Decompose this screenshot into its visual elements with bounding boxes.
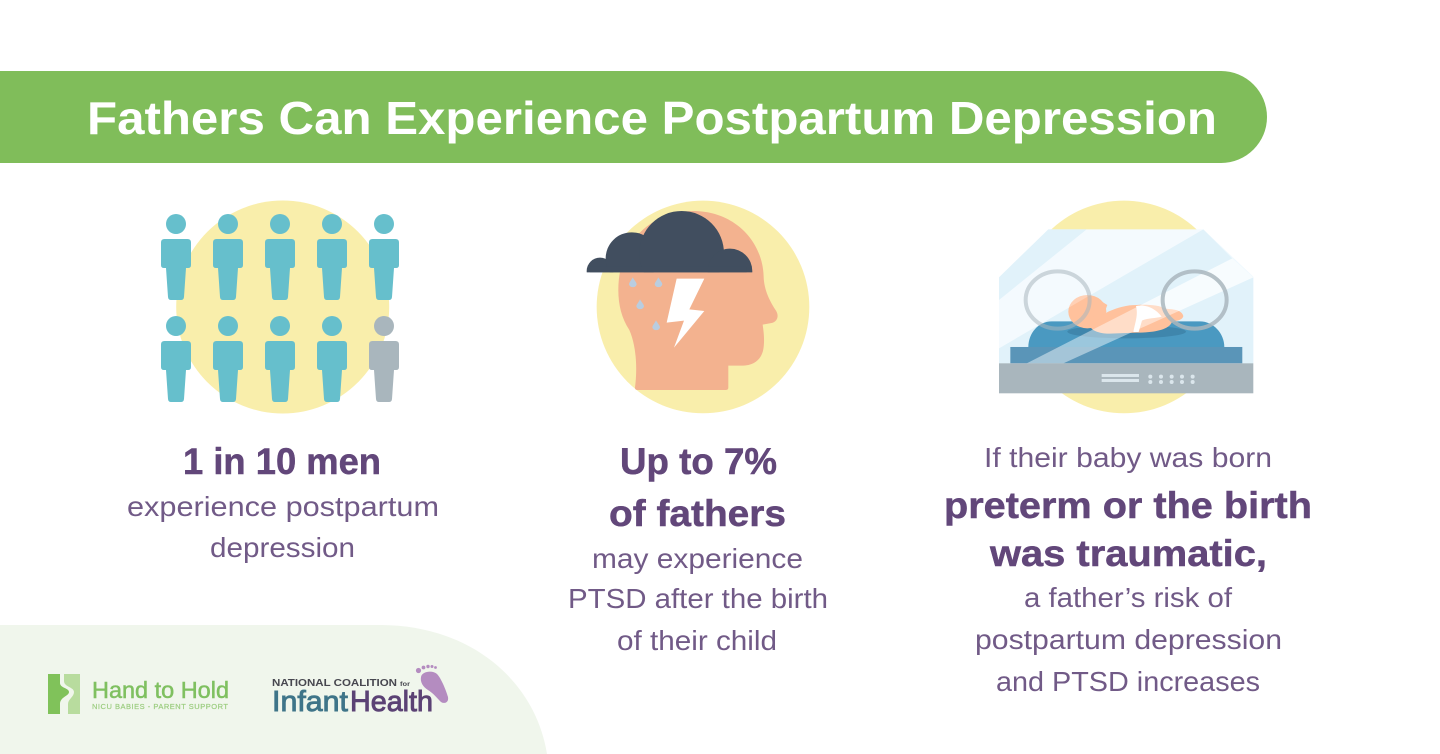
text block: up to 7% of fathers: of fathers xyxy=(609,493,786,534)
text block: up to 7% of fathers: may experience xyxy=(592,543,803,574)
text block: up to 7% of fathers: of their child xyxy=(617,625,777,656)
icon: head with storm cloud xyxy=(587,201,809,413)
text block: up to 7% of fathers: Up to 7% xyxy=(620,441,777,482)
logo: National Coalition for Infant Health xyxy=(272,665,448,718)
baby xyxy=(1068,295,1183,334)
text block: 1 in 10 men xyxy=(127,441,439,563)
text block: 1 in 10 men: depression xyxy=(210,532,355,563)
logo: National Coalition for Infant Health: for xyxy=(400,681,411,688)
text block: preterm or traumatic birth: postpartum depression xyxy=(975,624,1282,655)
logo: National Coalition for Infant Health: Health xyxy=(350,686,433,718)
incubator base xyxy=(999,363,1253,393)
text block: preterm or traumatic birth xyxy=(944,442,1312,697)
icon: lightning bolt xyxy=(667,279,704,348)
icon: incubator with baby xyxy=(999,201,1253,413)
text block: preterm or traumatic birth: preterm or the birth xyxy=(944,485,1312,526)
logo: National Coalition for Infant Health: Infant xyxy=(272,686,348,718)
text block: preterm or traumatic birth: was traumatic, xyxy=(989,533,1267,574)
panel: footer logos background xyxy=(0,625,547,754)
text block: up to 7% of fathers xyxy=(568,441,828,656)
icon: ten people, one in grey xyxy=(161,200,399,414)
title banner xyxy=(0,71,1267,163)
text block: preterm or traumatic birth: and PTSD increases xyxy=(996,666,1260,697)
text block: up to 7% of fathers: PTSD after the birth xyxy=(568,583,828,614)
logo: Hand to Hold: Hand to Hold xyxy=(92,677,229,703)
text block: 1 in 10 men: experience postpartum xyxy=(127,491,439,522)
text block: preterm or traumatic birth: If their baby was born xyxy=(984,442,1272,473)
logo: Hand to Hold: NICU BABIES - PARENT SUPPORT xyxy=(92,702,228,711)
incubator arm ports xyxy=(1026,271,1090,329)
logo: National Coalition for Infant Health: NATIONAL COALITION xyxy=(272,677,397,689)
text block: 1 in 10 men: 1 in 10 men xyxy=(183,441,381,482)
icon: rain drops xyxy=(629,277,662,330)
logo: Hand to Hold xyxy=(48,674,229,714)
title: Fathers Can Experience Postpartum Depression xyxy=(87,92,1217,144)
text block: preterm or traumatic birth: a father’s risk of xyxy=(1024,582,1232,613)
icon: footprint xyxy=(416,665,448,703)
